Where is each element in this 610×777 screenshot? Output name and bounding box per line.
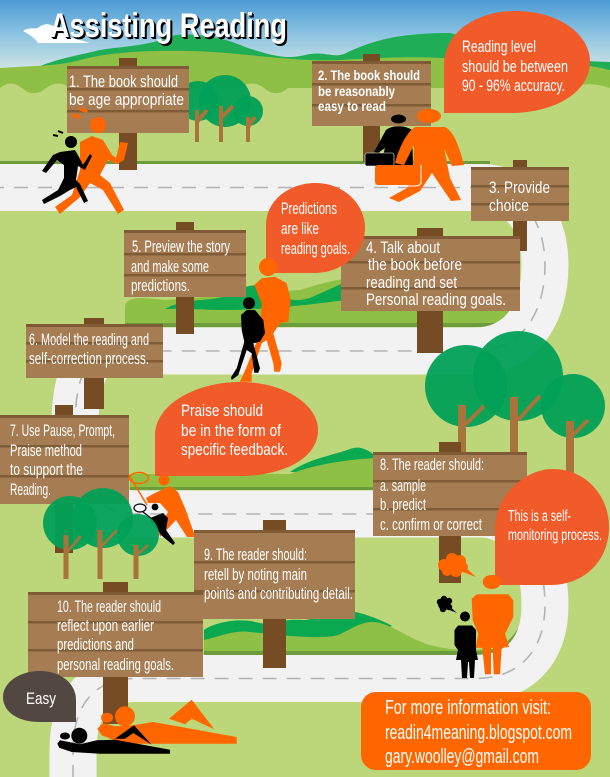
sign 6 xyxy=(26,318,163,409)
sign 1: be age appropriate xyxy=(69,91,184,109)
figures: two thinkers xyxy=(437,553,513,678)
callout: predictions: are like xyxy=(281,220,319,238)
sign 4: Personal reading goals. xyxy=(366,291,506,309)
sign 4: reading and set xyxy=(366,274,457,292)
sign 10 xyxy=(28,582,203,724)
sign 7 xyxy=(0,405,129,553)
sign 3: choice xyxy=(489,197,529,215)
callout: praise xyxy=(155,382,318,476)
trees right xyxy=(425,331,605,475)
sign 7: to support the xyxy=(10,461,83,479)
sign 7: Praise method xyxy=(10,442,82,460)
sign 4: 4. Talk about xyxy=(366,239,440,257)
sign 1 xyxy=(67,58,189,170)
figures: resting readers xyxy=(57,700,237,754)
sign 2: easy to read xyxy=(318,98,386,114)
sign 8: a. sample xyxy=(380,477,426,495)
sign 9: 9. The reader should: xyxy=(204,546,307,564)
sign 8 xyxy=(373,442,527,583)
hill patch between roads two and three xyxy=(130,448,380,490)
sign 9 xyxy=(194,520,355,668)
cloud xyxy=(23,24,90,43)
figures: pause prompt praise xyxy=(129,472,194,545)
callout: self monitoring: This is a self- xyxy=(508,508,571,525)
callout: predictions: Predictions xyxy=(281,200,337,218)
callout: predictions: reading goals. xyxy=(281,240,350,258)
sign 4: the book before xyxy=(368,256,462,274)
sign 3: 3. Provide xyxy=(489,179,550,197)
callout: predictions xyxy=(266,183,365,273)
background hills xyxy=(0,33,610,95)
sign 10: personal reading goals. xyxy=(57,656,174,674)
sign 5: predictions. xyxy=(131,277,190,295)
sky xyxy=(0,0,610,80)
figures: woman and child walking xyxy=(231,258,291,382)
sign 10: 10. The reader should xyxy=(57,598,161,616)
sign 2: 2. The book should xyxy=(318,67,420,83)
winding road xyxy=(0,188,545,777)
sign 7: 7. Use Pause, Prompt, xyxy=(10,422,115,440)
hill patch between roads three and four xyxy=(204,612,523,655)
callout: praise: specific feedback. xyxy=(181,440,288,459)
callout: praise: be in the form of xyxy=(181,421,281,440)
callout: reading level xyxy=(444,11,590,113)
figures: orange and black runners xyxy=(42,107,128,214)
sign 9: retell by noting main xyxy=(204,566,307,584)
callout: reading level: Reading level xyxy=(462,37,536,56)
sign 1: 1. The book should xyxy=(69,73,178,91)
sign 5: 5. Preview the story xyxy=(132,238,231,256)
footer contact box: For more information visit: xyxy=(385,697,551,719)
callout: praise: Praise should xyxy=(181,401,263,420)
sign 7: Reading. xyxy=(10,481,51,499)
sign 2 xyxy=(312,54,431,162)
callout: reading level: should be between xyxy=(462,57,568,76)
sign 4 xyxy=(341,228,520,353)
sign 9: points and contributing detail. xyxy=(204,585,353,603)
callout: easy xyxy=(3,671,76,722)
sign 8: c. confirm or correct xyxy=(380,516,482,534)
sign 10: reflect upon earlier xyxy=(57,617,154,635)
callout: reading level: 90 - 96% accuracy. xyxy=(462,76,565,95)
sign 10: predictions and xyxy=(57,636,134,654)
figures: black and orange walkers with briefcases xyxy=(365,109,464,202)
sign 5: and make some xyxy=(131,258,209,276)
road one edge xyxy=(0,161,490,164)
callout: self monitoring xyxy=(495,469,609,585)
trees upper left xyxy=(178,75,263,142)
footer contact box: gary.woolley@gmail.com xyxy=(385,746,539,768)
trees lower left xyxy=(43,488,159,579)
sign 5 xyxy=(124,222,246,334)
sign 2: be reasonably xyxy=(318,83,395,99)
sign 8: 8. The reader should: xyxy=(380,456,484,474)
callout: easy: Easy xyxy=(26,689,56,708)
hill patch between roads one and two xyxy=(125,272,528,327)
footer contact box xyxy=(361,692,591,770)
sign 3 xyxy=(471,160,569,251)
title: Assisting Reading xyxy=(50,7,287,45)
sign 8: b. predict xyxy=(380,496,426,514)
sign 6: 6. Model the reading and xyxy=(29,331,149,349)
sign 6: self-correction process. xyxy=(29,350,149,368)
